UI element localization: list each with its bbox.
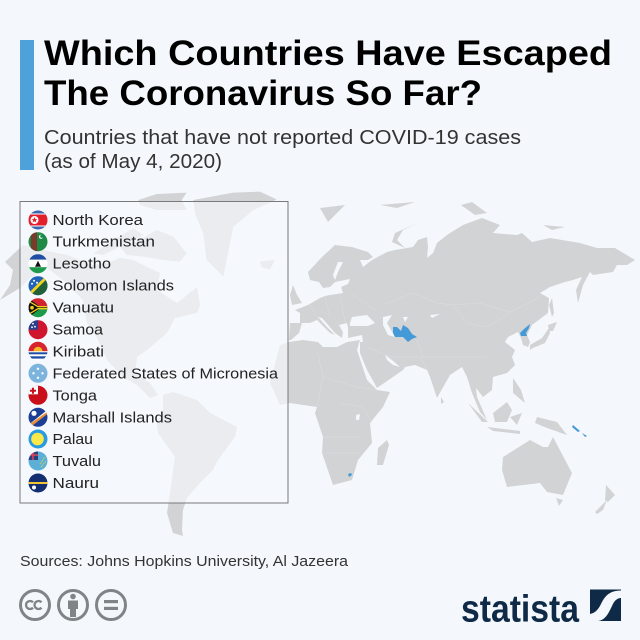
- legend: North Korea: North Korea: [52, 212, 144, 229]
- accent bar: [20, 40, 34, 170]
- title: Which Countries Have Escaped: [44, 34, 612, 73]
- legend: Lesotho: Lesotho: [52, 256, 111, 273]
- legend: Solomon Islands: Solomon Islands: [52, 278, 174, 295]
- logo: statista: statista: [461, 588, 580, 630]
- map: country borders: [310, 293, 540, 453]
- legend: Federated States of Micronesia: Federated States of Micronesia: [52, 365, 279, 382]
- map: Americas and Greenland: [0, 192, 277, 536]
- country: North Korea: [520, 324, 530, 336]
- legend: Turkmenistan: [28, 232, 155, 252]
- legend: Nauru: Nauru: [52, 475, 99, 492]
- source: Sources: Johns Hopkins University, Al Jazeera: [20, 553, 349, 570]
- legend: Kiribati: Kiribati: [52, 343, 104, 360]
- legend: Palau: Palau: [52, 431, 93, 448]
- legend: Kiribati: [28, 341, 104, 361]
- legend: Vanuatu: [28, 298, 114, 318]
- map: inland waters: [333, 262, 440, 420]
- legend: Nauru: [28, 473, 99, 493]
- legend: Marshall Islands: [28, 407, 172, 427]
- legend: Tonga: [28, 385, 98, 405]
- legend: North Korea: [28, 210, 144, 230]
- country: Lesotho: [348, 473, 352, 477]
- legend: Vanuatu: Vanuatu: [52, 300, 114, 317]
- subtitle: Countries that have not reported COVID-19 cases: [44, 127, 521, 149]
- map: Eurasia: [270, 202, 635, 514]
- legend: Tuvalu: [28, 451, 101, 471]
- subtitle: (as of May 4, 2020): [44, 151, 222, 173]
- legend: Marshall Islands: Marshall Islands: [52, 409, 172, 426]
- legend: Tonga: Tonga: [52, 387, 98, 404]
- legend panel: [20, 202, 288, 503]
- legend: Lesotho: [28, 254, 111, 274]
- legend: Turkmenistan: Turkmenistan: [52, 234, 155, 251]
- subtitle: [44, 127, 521, 173]
- legend: Samoa: Samoa: [52, 322, 104, 339]
- country: Solomon Islands and Pacific islands: [572, 425, 587, 437]
- legend: Solomon Islands: [28, 276, 174, 296]
- world map: [0, 192, 635, 536]
- highlighted countries: [348, 324, 587, 477]
- title: The Coronavirus So Far?: [44, 74, 482, 113]
- title: [44, 34, 612, 113]
- legend: Palau: [28, 429, 93, 449]
- country: Turkmenistan: [393, 325, 417, 342]
- legend: Tuvalu: Tuvalu: [52, 453, 101, 470]
- legend: Samoa: [28, 320, 104, 340]
- icon: statista mark: [590, 590, 621, 621]
- icon: creative commons: [20, 590, 126, 620]
